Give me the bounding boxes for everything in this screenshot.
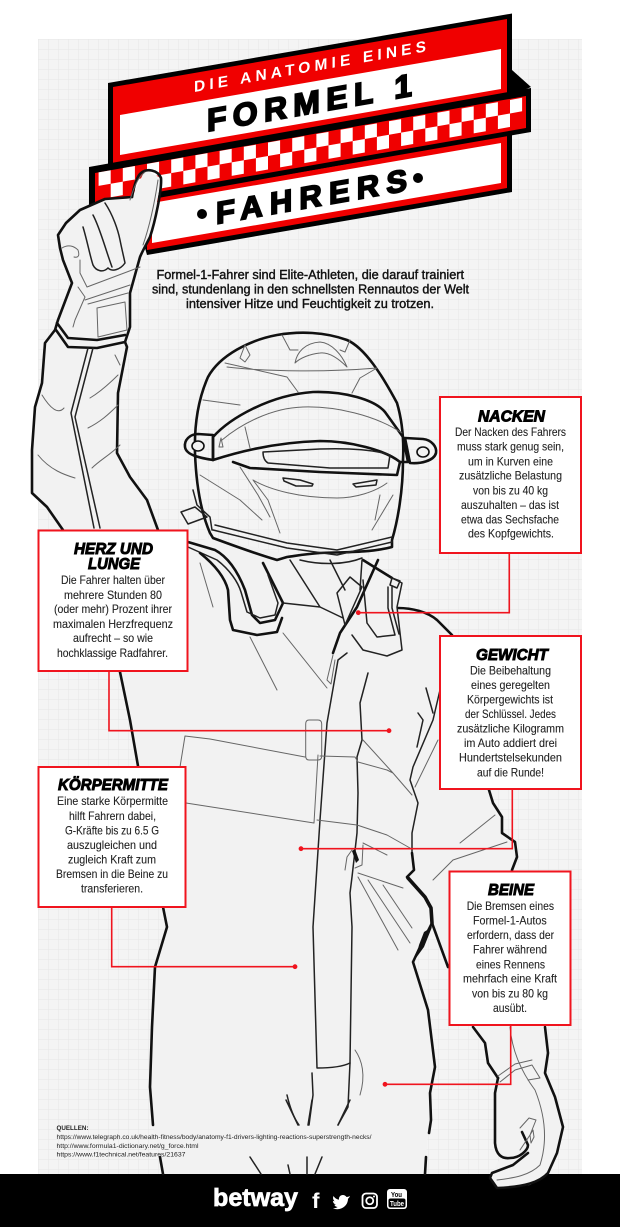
sources: QUELLEN: <box>56 1125 88 1132</box>
text: beine body: Fahrer während <box>473 943 547 957</box>
title line: formel 1: FORMEL 1 <box>207 67 412 139</box>
icon: twitter <box>333 1195 350 1209</box>
text: gewicht body: der Schlüssel. Jedes <box>465 707 556 721</box>
helmet shell <box>195 333 403 560</box>
text: herz und lunge body: (oder mehr) Prozent ihrer <box>54 602 172 616</box>
heading: herz und lunge: LUNGE <box>88 556 141 573</box>
text: herz und lunge body <box>53 573 173 660</box>
title line: die anatomie eines: DIE ANATOMIE EINES <box>194 39 426 96</box>
text: herz und lunge body: mehrere Stunden 80 <box>64 588 162 602</box>
suit zip and centre lines <box>250 560 378 1174</box>
text: gewicht body <box>457 663 564 779</box>
leader: nacken <box>356 553 509 615</box>
heading: beine: BEINE <box>488 882 535 899</box>
chest patch lines <box>180 720 412 950</box>
HANS device: right pad <box>352 560 402 656</box>
icon: facebook: f <box>312 1190 321 1213</box>
raised arm outline <box>32 170 187 590</box>
sources: http://www.formula1-dictionary.net/g_force.html <box>56 1143 199 1150</box>
text: nacken body <box>455 425 566 541</box>
visor details <box>219 407 402 448</box>
inner right arm lines <box>407 688 507 1174</box>
text: gewicht body: eines geregelten <box>471 678 550 692</box>
visor mounts <box>185 434 213 460</box>
text: körpermitte body <box>56 794 168 895</box>
text: beine body: erfordern, dass der <box>467 928 554 942</box>
text: körpermitte body: auszugleichen und <box>67 838 157 852</box>
neck and collar <box>283 558 362 625</box>
text: beine body: Formel-1-Autos <box>473 914 547 928</box>
leader: gewicht <box>299 789 512 851</box>
panel: beine <box>450 872 570 1025</box>
text: körpermitte body: transferieren. <box>81 881 143 895</box>
text: herz und lunge body: hochklassige Radfahrer. <box>57 646 168 660</box>
text: gewicht body: Die Beibehaltung <box>470 663 551 677</box>
text: gewicht body: im Auto addiert drei <box>464 736 557 750</box>
text: nacken body: etwa das Sechsfache <box>461 513 559 527</box>
intro text: intensiver Hitze und Feuchtigkeit zu trotzen. <box>186 297 434 311</box>
text: körpermitte body: zugleich Kraft zum <box>68 852 156 866</box>
figure silhouette fill <box>32 170 563 1188</box>
text: nacken body: muss stark genug sein, <box>457 440 564 454</box>
banner: checkered band <box>89 70 531 209</box>
title banner <box>89 14 531 255</box>
leader lines <box>109 553 512 1087</box>
text: körpermitte body: Bremsen in die Beine zu <box>56 867 168 881</box>
eye opening <box>263 449 390 468</box>
HANS device: left pad <box>188 542 327 690</box>
torso and right arm outline <box>398 608 517 1078</box>
helmet <box>181 333 436 560</box>
title bullets <box>197 173 423 219</box>
leader: herz und lunge <box>109 671 391 733</box>
title line: fahrers: FAHRERS <box>216 163 407 231</box>
footer bar <box>0 1174 620 1227</box>
chin vents and lines <box>283 478 377 487</box>
text: körpermitte body: hilft Fahrern dabei, <box>69 809 156 823</box>
footer logo: betway: betway <box>213 1184 298 1212</box>
panel: nacken <box>440 397 581 553</box>
heading: herz und lunge <box>74 541 153 573</box>
hand on the right <box>490 1027 563 1188</box>
text: gewicht body: zusätzliche Kilogramm <box>457 722 564 736</box>
sources: https://www.telegraph.co.uk/health-fitness/body/anatomy-f1-drivers-lighting-reactions-superstrength-necks/ <box>56 1134 372 1141</box>
leader: körpermitte <box>112 907 297 969</box>
heading: nacken: NACKEN <box>478 408 546 425</box>
text: herz und lunge body: aufrecht – so wie <box>73 631 153 645</box>
banner: lower plate <box>130 128 512 255</box>
text: beine body: von bis zu 80 kg <box>472 986 548 1000</box>
sources <box>56 1125 372 1159</box>
torso left edge <box>120 672 167 1174</box>
text: beine body: ausübt. <box>493 1001 527 1015</box>
helmet top details <box>203 335 377 405</box>
leader: beine <box>383 1025 511 1087</box>
visor band <box>213 392 408 462</box>
text: herz und lunge body: maximalen Herzfrequenz <box>53 617 173 631</box>
text: körpermitte body: Eine starke Körpermitte <box>57 794 168 808</box>
text: beine body: mehrfach eine Kraft <box>463 972 558 986</box>
icon: instagram <box>362 1194 377 1208</box>
intro text: sind, stundenlang in den schnellsten Rennautos der Welt <box>152 283 470 297</box>
text: gewicht body: auf die Runde! <box>477 765 544 779</box>
text: gewicht body: Körpergewichts ist <box>467 693 554 707</box>
icon: youtube: Tube <box>390 1201 404 1208</box>
chin strap tab <box>181 507 207 524</box>
text: nacken body: um in Kurven eine <box>468 454 553 468</box>
panel: herz und lunge <box>38 530 188 671</box>
text: herz und lunge body: Die Fahrer halten über <box>61 573 165 587</box>
icon: youtube: You <box>391 1192 402 1199</box>
intro text: Formel-1-Fahrer sind Elite-Athleten, die darauf trainiert <box>156 268 465 282</box>
text: nacken body: von bis zu 40 kg <box>473 483 548 497</box>
text: gewicht body: Hundertstelsekunden <box>459 751 562 765</box>
text: beine body <box>463 899 558 1015</box>
text: nacken body: des Kopfgewichts. <box>468 527 554 541</box>
banner: top plate <box>108 14 512 170</box>
heading: herz und lunge: HERZ UND <box>74 541 153 558</box>
panel: körpermitte <box>38 767 186 907</box>
intro text <box>152 268 470 311</box>
heading: gewicht: GEWICHT <box>476 647 550 664</box>
text: beine body: Die Bremsen eines <box>467 899 554 913</box>
sources: https://www.f1technical.net/features/21637 <box>56 1152 186 1159</box>
text: beine body: eines Rennens <box>476 957 545 971</box>
icon: youtube <box>387 1189 407 1209</box>
text: nacken body: Der Nacken des Fahrers <box>455 425 566 439</box>
heading: körpermitte: KÖRPERMITTE <box>58 777 169 794</box>
text: nacken body: zusätzliche Belastung <box>459 469 562 483</box>
driver figure <box>32 170 563 1188</box>
panel: gewicht <box>440 636 581 789</box>
text: nacken body: auszuhalten – das ist <box>461 498 560 512</box>
text: körpermitte body: G-Kräfte bis zu 6.5 G <box>65 824 159 838</box>
